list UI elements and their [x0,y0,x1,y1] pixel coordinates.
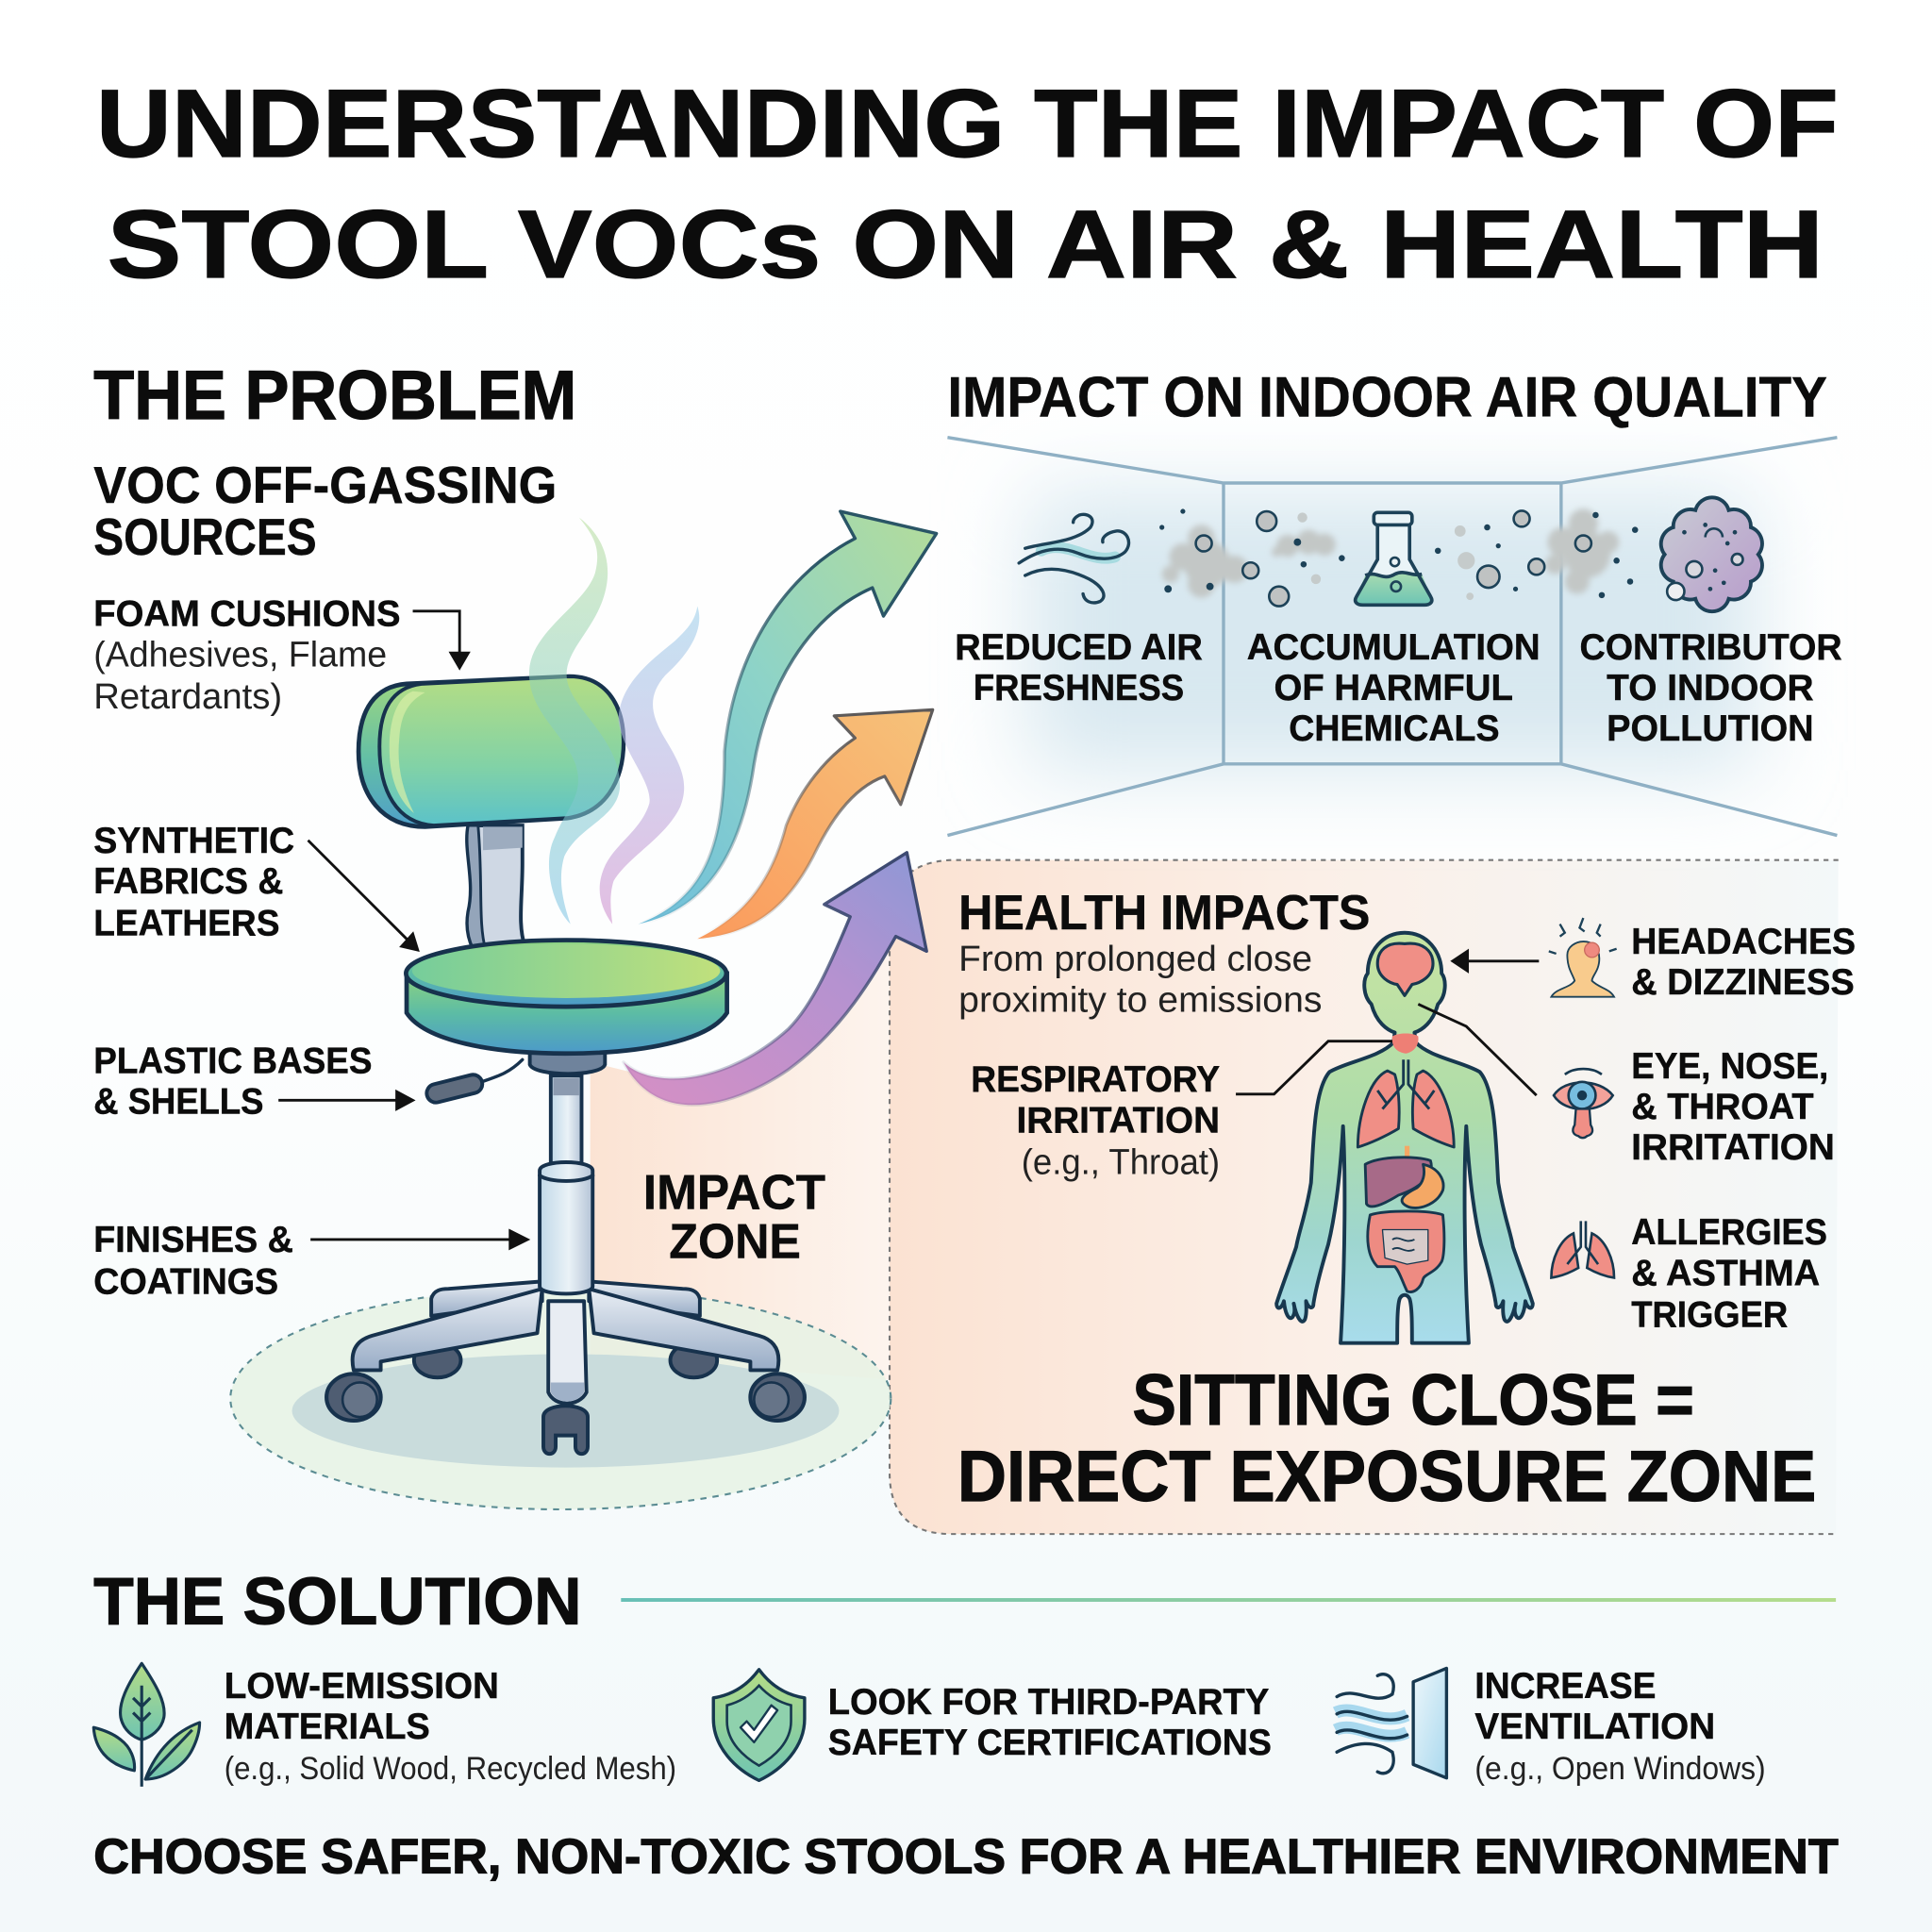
icon: ventilation [1336,1668,1446,1778]
organ: brain [1377,943,1433,995]
icon: lungs small [1551,1221,1614,1277]
subheading: sources: VOC OFF-GASSING [93,456,557,514]
label: foam cushions: Retardants) [93,677,282,717]
panel border: dashed [890,860,1839,1534]
text: low-emission materials [225,1666,676,1787]
callout: direct exposure zone: DIRECT EXPOSURE ZONE [958,1437,1816,1517]
label: foam cushions: (Adhesives, Flame [93,636,387,675]
stool wheels rear [414,1343,717,1377]
arrow: purple to health [624,853,926,1105]
organ: throat [1392,1034,1418,1054]
divider rule [621,1598,1836,1602]
callout: direct exposure zone [958,1360,1816,1517]
callout: direct exposure zone: SITTING CLOSE = [1132,1360,1694,1441]
text: low-emission materials: MATERIALS [225,1707,430,1747]
label: accumulation: CHEMICALS [1289,708,1500,749]
icon: pollution cloud [1661,497,1762,611]
label: contributor: TO INDOOR [1607,668,1814,708]
label: finishes: COATINGS [93,1261,278,1302]
label: synthetic fabrics: SYNTHETIC [93,821,294,861]
label: plastic bases: & SHELLS [93,1082,264,1123]
label: synthetic fabrics [93,821,294,943]
panel: the problem [93,358,576,1302]
text: ventilation: INCREASE [1474,1666,1656,1707]
label: headaches [1631,922,1856,1003]
label: accumulation: ACCUMULATION [1247,627,1541,668]
label: respiratory [971,1059,1220,1183]
vapour wisp: blue to purple [600,607,699,924]
leader lines [1236,951,1539,1095]
icon: wind [1019,514,1129,603]
label: impact zone: ZONE [669,1215,801,1270]
label: reduced air freshness: REDUCED AIR [955,627,1203,668]
label: allergies [1631,1212,1827,1336]
label: reduced air freshness [955,627,1203,708]
panel: health impacts [958,886,1856,1517]
label: impact zone: IMPACT [643,1165,825,1220]
label: plastic bases: PLASTIC BASES [93,1041,372,1082]
text: ventilation: (e.g., Open Windows) [1474,1751,1766,1787]
label: allergies: TRIGGER [1631,1295,1788,1336]
organ: lungs [1357,1059,1454,1147]
stool front legs [353,1289,778,1404]
label: foam cushions: FOAM CUSHIONS [93,594,400,635]
label: accumulation: OF HARMFUL [1274,668,1513,708]
label: accumulation [1247,627,1541,749]
label: eye nose throat [1631,1046,1835,1168]
stool seat [406,941,727,1054]
illustration: human body [1276,933,1533,1343]
room lines [947,438,1837,836]
label: respiratory: (e.g., Throat) [1022,1143,1220,1183]
organ: liver and stomach [1365,1158,1443,1208]
arrow: orange [697,709,933,939]
subheading: sources: SOURCES [93,508,317,566]
stool lever [425,1059,523,1105]
icon: flask [1356,512,1432,605]
label: synthetic fabrics: FABRICS & [93,861,283,902]
panel: impact on indoor air quality [947,365,1842,836]
label: headaches: HEADACHES [1631,922,1856,962]
arrow: green to air quality [639,511,937,924]
callout arrows [278,611,527,1248]
label: finishes [93,1220,293,1302]
stool floor zone [230,1288,891,1509]
room glow [1029,492,1756,770]
icon: eye and nose [1554,1069,1613,1138]
stool backrest cushion [358,676,624,826]
particles [1159,508,1638,607]
icon: leaves [93,1663,200,1787]
heading: health impacts: From prolonged close [958,940,1312,979]
heading: indoor air: IMPACT ON INDOOR AIR QUALITY [947,365,1827,428]
text: low-emission materials: (e.g., Solid Wood, Recycled Mesh) [225,1751,676,1787]
heading: the problem: THE PROBLEM [93,358,576,434]
label: impact zone [643,1165,825,1270]
label: headaches: & DIZZINESS [1631,962,1855,1003]
label: eye nose throat: EYE, NOSE, [1631,1046,1828,1087]
heading: health impacts: HEALTH IMPACTS [958,886,1370,941]
panel: the solution [93,1563,1839,1884]
organ: esophagus [1405,1146,1409,1158]
stool seat plate [530,1051,605,1074]
label: eye nose throat: IRRITATION [1631,1127,1835,1168]
stool back post [467,825,525,949]
text: certifications [828,1682,1272,1763]
vapour wisp: green to blue [529,518,620,924]
title [96,70,1839,298]
heading: the solution: THE SOLUTION [93,1563,581,1638]
title: UNDERSTANDING THE IMPACT OF [96,70,1839,177]
icon: shield [713,1670,805,1780]
stool rear legs [431,1281,700,1316]
label: respiratory: RESPIRATORY [971,1059,1220,1100]
label: foam cushions [93,594,400,717]
text: ventilation [1474,1666,1766,1787]
label: allergies: & ASTHMA [1631,1253,1820,1293]
label: plastic bases [93,1041,372,1123]
text: certifications: SAFETY CERTIFICATIONS [828,1723,1272,1763]
text: ventilation: VENTILATION [1474,1707,1715,1747]
stool gas cylinder [540,1075,592,1293]
label: contributor: POLLUTION [1607,708,1814,749]
label: contributor [1579,627,1842,749]
organ: intestine [1368,1211,1444,1291]
label: allergies: ALLERGIES [1631,1212,1827,1253]
panel: health impacts background [890,860,1839,1534]
subheading: sources [93,456,557,566]
label: respiratory: IRRITATION [1017,1100,1220,1141]
label: finishes: FINISHES & [93,1220,293,1260]
icon: headache [1549,918,1617,997]
closing statement: CHOOSE SAFER, NON-TOXIC STOOLS FOR A HEALTHIER ENVIRONMENT [93,1829,1839,1884]
title: STOOL VOCs ON AIR & HEALTH [108,191,1824,298]
panel: impact zone floor glow [591,930,893,1380]
label: reduced air freshness: FRESHNESS [974,668,1184,708]
text: certifications: LOOK FOR THIRD-PARTY [828,1682,1269,1723]
label: contributor: CONTRIBUTOR [1579,627,1842,668]
label: synthetic fabrics: LEATHERS [93,903,279,943]
text: low-emission materials: LOW-EMISSION [225,1666,499,1707]
stool wheels front [326,1374,805,1454]
illustration: stool [326,676,805,1454]
label: eye nose throat: & THROAT [1631,1087,1814,1127]
heading: health impacts: proximity to emissions [958,980,1322,1020]
heading: health impacts [958,886,1370,1020]
